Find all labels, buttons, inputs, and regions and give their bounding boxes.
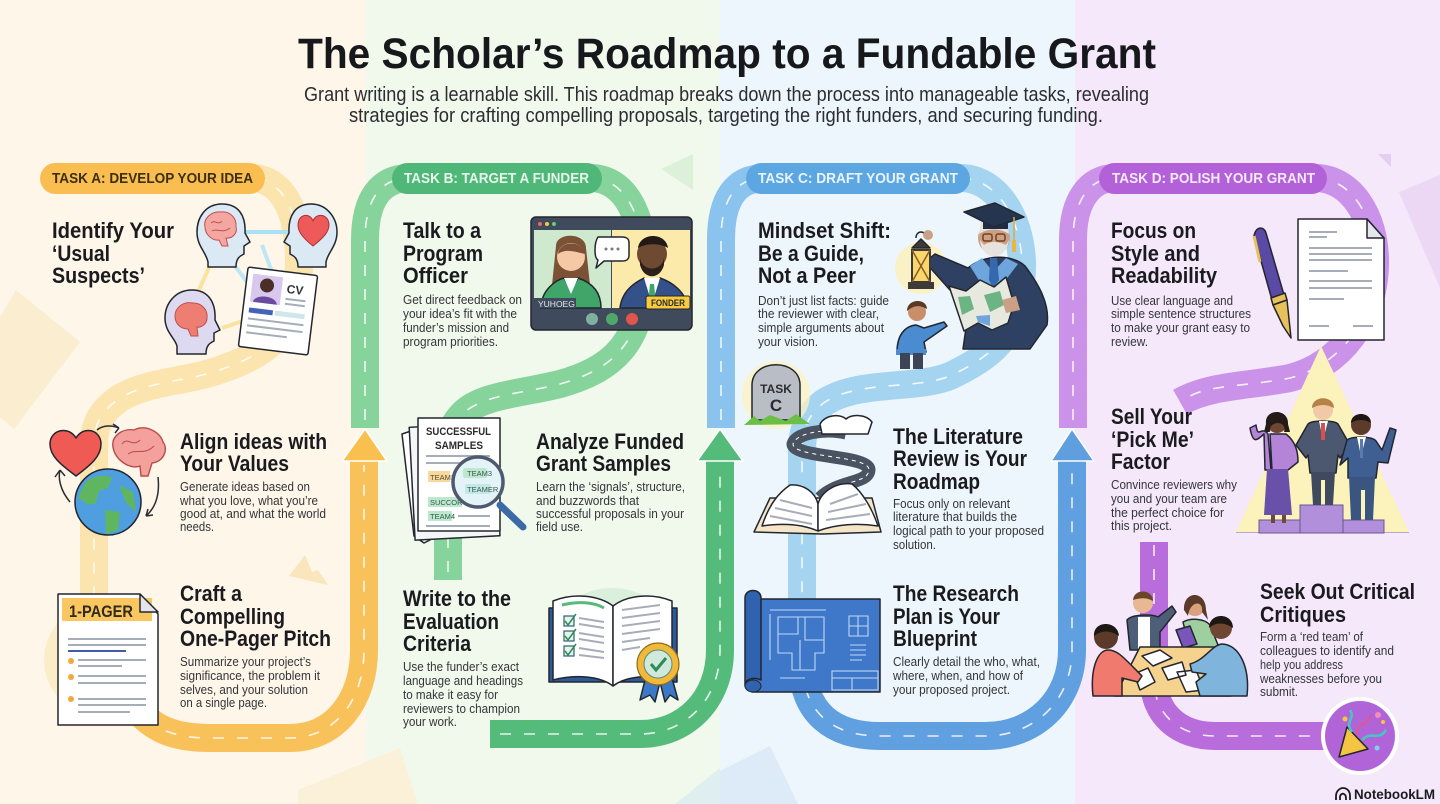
text: one-pager: on a single page.	[180, 696, 267, 710]
text: style and readability: simple sentence structures	[1111, 307, 1251, 321]
pill: task A	[40, 163, 265, 194]
heading: align ideas	[180, 429, 327, 476]
icon: successful samples	[402, 418, 523, 543]
heading: literature review: The Literature	[893, 424, 1023, 449]
text: critical critiques: help you address	[1260, 658, 1343, 672]
text: evaluation criteria: your work.	[403, 715, 457, 729]
heading: align ideas: Your Values	[180, 451, 289, 476]
arrow: task C to task D	[1051, 429, 1094, 461]
text: funded samples: Learn the ‘signals’, structure,	[536, 480, 685, 494]
text: program officer: funder’s mission and	[403, 321, 509, 335]
heading: mindset shift: Not a Peer	[758, 263, 856, 288]
heading: program officer: Officer	[403, 263, 468, 288]
text: critical critiques: Form a ‘red team’ of	[1260, 630, 1363, 644]
subtitle: Grant writing is a learnable skill. This roadmap breaks down the process into manageable tasks, revealing	[304, 84, 1149, 106]
heading: evaluation criteria: Criteria	[403, 631, 472, 656]
text: research plan	[892, 655, 1040, 697]
heading: one-pager: Craft a	[180, 581, 243, 606]
icon: pen and document	[1254, 219, 1384, 340]
icon: blueprint	[745, 590, 880, 692]
pill: task D	[1099, 163, 1327, 194]
heading: mindset shift: Be a Guide,	[758, 241, 864, 266]
icon: heart, brain and globe	[50, 424, 165, 535]
heading: critical critiques: Seek Out Critical	[1260, 579, 1415, 604]
heading: pick me factor: Factor	[1111, 449, 1170, 474]
text: align ideas: needs.	[180, 520, 214, 534]
heading: one-pager: One-Pager Pitch	[180, 626, 331, 651]
text: critical critiques	[1259, 630, 1394, 699]
heading: literature review	[893, 424, 1027, 494]
text: program officer: program priorities.	[403, 335, 498, 349]
text: program officer	[403, 293, 522, 349]
text: funded samples	[536, 480, 685, 534]
heading: evaluation criteria: Evaluation	[403, 609, 499, 634]
text: pick me factor	[1111, 478, 1238, 533]
text: literature review: literature that builds the	[893, 510, 1017, 524]
text: funded samples: and buzzwords that	[536, 494, 639, 508]
heading: research plan: The Research	[893, 581, 1019, 606]
text: pick me factor: this project.	[1111, 519, 1172, 533]
heading: literature review: Roadmap	[893, 469, 980, 494]
text: mindset shift: your vision.	[758, 335, 818, 349]
icon: book with checklist and seal	[549, 588, 679, 702]
text: mindset shift: simple arguments about	[758, 321, 884, 335]
heading: research plan: Plan is Your	[893, 604, 1000, 629]
text: one-pager: Summarize your project’s	[180, 655, 311, 669]
text: critical critiques: submit.	[1260, 685, 1298, 699]
text: evaluation criteria: Use the funder’s exact	[403, 660, 519, 674]
heading: usual suspects	[52, 218, 174, 288]
text: one-pager	[180, 655, 320, 710]
heading: evaluation criteria	[403, 586, 511, 656]
heading: program officer: Talk to a	[403, 218, 482, 243]
heading: mindset shift: Mindset Shift:	[758, 218, 891, 243]
icon: video call	[531, 217, 692, 330]
heading: style and readability: Style and	[1111, 241, 1200, 266]
heading: style and readability	[1111, 218, 1218, 288]
panel: task D	[1092, 163, 1415, 775]
text: align ideas: good at, and what the world	[180, 507, 326, 521]
road: task A	[94, 178, 364, 738]
text: evaluation criteria: reviewers to champion	[403, 702, 520, 716]
text: one-pager: selves, and your solution	[180, 683, 308, 697]
text: program officer: your idea’s fit with the	[403, 307, 517, 321]
icon: 1-pager document: 1-PAGER	[69, 602, 133, 621]
text: evaluation criteria: language and headings	[403, 674, 523, 688]
heading: pick me factor	[1111, 404, 1194, 474]
heading: usual suspects: Suspects’	[52, 263, 145, 288]
text: one-pager: significance, the problem it	[180, 669, 320, 683]
heading: style and readability: Readability	[1111, 263, 1218, 288]
heading: usual suspects: Identify Your	[52, 218, 174, 243]
pill: task D: TASK D: POLISH YOUR GRANT	[1112, 171, 1315, 187]
icon: successful samples: TEAMER	[467, 485, 499, 494]
text: mindset shift: the reviewer with clear,	[758, 307, 879, 321]
text: literature review	[893, 497, 1044, 552]
text: literature review: logical path to your proposed	[893, 524, 1044, 538]
text: align ideas: what you love, what you’re	[179, 494, 318, 508]
panel: task C	[742, 163, 1048, 697]
heading: funded samples	[536, 429, 684, 476]
icon: usual suspects network: CV	[286, 282, 304, 298]
text: style and readability: review.	[1111, 335, 1148, 349]
road: task D	[1073, 178, 1375, 736]
text: literature review: Focus only on relevant	[893, 497, 1010, 511]
heading: research plan	[893, 581, 1019, 651]
text: research plan: your proposed project.	[893, 683, 1010, 697]
text: evaluation criteria: to make it easy for	[403, 688, 498, 702]
icon: successful samples: TEAM3	[430, 473, 455, 482]
text: style and readability: Use clear language and	[1111, 294, 1233, 308]
icon: open book with winding road	[754, 416, 881, 534]
icon: successful samples: SUCCOR	[430, 498, 463, 507]
heading: one-pager: Compelling	[180, 604, 285, 629]
text: pick me factor: the perfect choice for	[1111, 506, 1224, 520]
text: style and readability	[1111, 294, 1251, 349]
text: research plan: where, when, and how of	[892, 669, 1023, 683]
heading: evaluation criteria: Write to the	[403, 586, 511, 611]
icon: video call: FONDER	[651, 298, 685, 309]
icon: party popper badge	[1321, 697, 1399, 775]
text: critical critiques: colleagues to identify and	[1260, 644, 1394, 658]
panel: task A	[40, 163, 337, 725]
heading: pick me factor: ‘Pick Me’	[1111, 427, 1194, 452]
heading: mindset shift	[758, 218, 891, 288]
text: evaluation criteria	[403, 660, 523, 729]
road: task C	[721, 178, 1072, 736]
text: funded samples: successful proposals in your	[536, 507, 684, 521]
title: The Scholar’s Roadmap to a Fundable Grant	[298, 30, 1156, 78]
heading: usual suspects: ‘Usual	[52, 241, 110, 266]
icon: task c tombstone	[742, 361, 810, 429]
icon: successful samples: SAMPLES	[435, 440, 483, 452]
icon: task c tombstone: TASK	[760, 382, 792, 396]
text: mindset shift: Don’t just list facts: guide	[758, 294, 889, 308]
text: align ideas	[179, 480, 326, 534]
text: pick me factor: you and your team are	[1111, 492, 1227, 506]
road: task B	[365, 178, 720, 734]
icon: successful samples: TEAM4	[430, 512, 455, 521]
heading: style and readability: Focus on	[1111, 218, 1196, 243]
text: critical critiques: weaknesses before you	[1259, 672, 1382, 686]
heading: critical critiques: Critiques	[1260, 602, 1346, 627]
pill: task C	[746, 163, 970, 194]
text: style and readability: to make your grant easy to	[1111, 321, 1250, 335]
icon: professor with lantern and child	[895, 203, 1048, 369]
text: align ideas: Generate ideas based on	[180, 480, 310, 494]
heading: literature review: Review is Your	[893, 446, 1027, 471]
icon: team on podium under spotlight	[1236, 346, 1409, 533]
icon: 1-pager document	[44, 594, 158, 725]
text: program officer: Get direct feedback on	[403, 293, 522, 307]
subtitle: strategies for crafting compelling proposals, targeting the right funders, and securing funding.	[349, 105, 1103, 127]
pill: task A: TASK A: DEVELOP YOUR IDEA	[52, 171, 253, 187]
icon: usual suspects network	[165, 204, 337, 355]
icon: video call: YUHOEG	[538, 299, 575, 309]
text: mindset shift	[758, 294, 889, 349]
heading: research plan: Blueprint	[893, 626, 978, 651]
icon: successful samples: TEAM3	[467, 469, 492, 478]
heading: funded samples: Grant Samples	[536, 451, 671, 476]
pill: task B	[392, 163, 602, 194]
icon: red team around table	[1092, 591, 1248, 696]
text: literature review: solution.	[893, 538, 936, 552]
arrow: task B to task C	[697, 429, 743, 461]
icon: task c tombstone: C	[770, 396, 782, 415]
text: funded samples: field use.	[536, 520, 583, 534]
panel: task B	[392, 163, 692, 729]
subtitle	[304, 84, 1149, 127]
pill: task B: TASK B: TARGET A FUNDER	[404, 171, 589, 187]
text: pick me factor: Convince reviewers why	[1111, 478, 1238, 492]
heading: program officer	[403, 218, 483, 288]
logo: NotebookLM: NotebookLM	[1354, 786, 1435, 802]
heading: program officer: Program	[403, 241, 483, 266]
heading: one-pager	[180, 581, 331, 651]
pill: task C: TASK C: DRAFT YOUR GRANT	[758, 171, 958, 187]
arrow: task A to task B	[342, 429, 387, 461]
text: research plan: Clearly detail the who, what,	[893, 655, 1040, 669]
heading: critical critiques	[1260, 579, 1415, 627]
heading: align ideas: Align ideas with	[180, 429, 327, 454]
heading: pick me factor: Sell Your	[1111, 404, 1192, 429]
heading: funded samples: Analyze Funded	[536, 429, 684, 454]
icon: successful samples: SUCCESSFUL	[426, 426, 491, 438]
